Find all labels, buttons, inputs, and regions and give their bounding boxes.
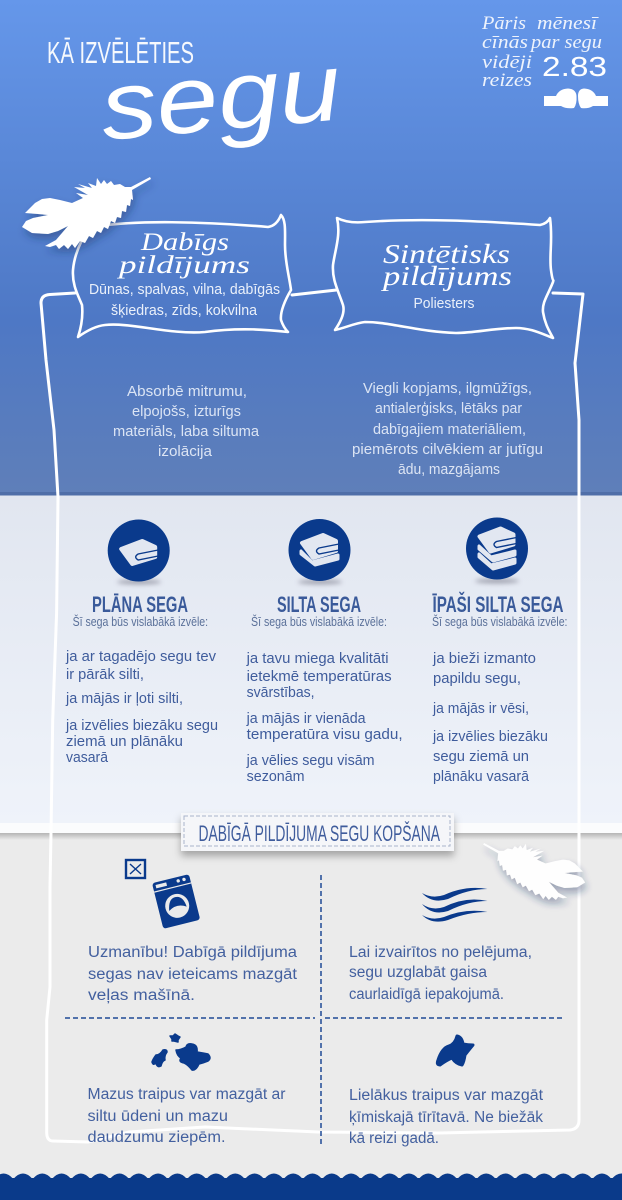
list: thin blanket	[65, 649, 218, 766]
list: extra warm blanket	[432, 651, 548, 785]
heading: īpaši silta sega: ĪPAŠI SILTA SEGA	[432, 592, 564, 617]
list: thin blanket: ja izvēlies biezāku segu	[65, 718, 218, 734]
tip text: Mazus traipus var mazgāt ar	[88, 1086, 286, 1103]
column: thin blanket	[65, 520, 218, 766]
icon: large stain	[437, 1036, 473, 1065]
tip text: Lielākus traipus var mazgāt	[349, 1087, 544, 1104]
fact: fights for the blanket: vidēji	[482, 52, 532, 73]
heading: sintētisks pildījums: pildījums	[380, 261, 512, 291]
tip text: segas nav ieteicams mazgāt	[88, 966, 298, 983]
tip text: caurlaidīgā iepakojumā.	[349, 986, 504, 1003]
heading: dabīgs pildījums: Dabīgs	[140, 229, 229, 256]
icon: small stains	[152, 1034, 210, 1070]
list: thin blanket: ja mājās ir ļoti silti,	[65, 691, 183, 707]
list: warm blanket: svārstības,	[247, 685, 315, 701]
background: dark divider strip	[0, 492, 622, 496]
tip text	[88, 944, 298, 1004]
tip text: Lai izvairītos no pelējuma,	[349, 944, 532, 961]
pillow text: natural filling	[89, 229, 280, 319]
title	[47, 33, 345, 161]
heading: plāna sega: PLĀNA SEGA	[92, 592, 188, 617]
list: warm blanket: sezonām	[247, 769, 305, 785]
list: extra warm blanket: plānāku vasarā	[433, 769, 530, 785]
synthetic material: Poliesters	[414, 296, 474, 312]
icon: feather top	[22, 177, 151, 249]
section label: care	[181, 813, 454, 851]
list: thin blanket: ziemā un plānāku	[66, 734, 183, 750]
natural materials list: Dūnas, spalvas, vilna, dabīgās	[89, 282, 280, 298]
tip text: segu uzglabāt gaisa	[349, 964, 487, 981]
care tip: small stains	[88, 1034, 286, 1146]
icon: air waves	[422, 888, 488, 922]
text: synthetic benefits: piemērots cilvēkiem ar jutīgu	[352, 442, 543, 458]
tip text	[349, 944, 532, 1003]
text: synthetic benefits: ādu, mazgājams	[398, 462, 500, 478]
text: natural benefits: Absorbē mitrumu,	[127, 384, 247, 400]
background: light blue section	[0, 494, 622, 823]
dashed grid dividers	[65, 875, 562, 1147]
pillow text: synthetic filling	[380, 239, 512, 312]
text: synthetic benefits: dabīgajiem materiāliem,	[373, 422, 526, 438]
list: warm blanket: ja vēlies segu visām	[246, 753, 375, 769]
fact: fights for the blanket: cīnās	[482, 32, 528, 53]
fact: fights for the blanket	[481, 13, 607, 91]
text: natural benefits: materiāls, laba siltuma	[113, 424, 260, 440]
background: grey care section	[0, 833, 622, 1178]
list: warm blanket: ja mājās ir vienāda	[246, 711, 367, 727]
tip text: daudzumu ziepēm.	[88, 1129, 226, 1146]
text: synthetic benefits: Viegli kopjams, ilgmūžīgs,	[363, 381, 532, 397]
icon: one folded blanket	[108, 520, 170, 584]
blanket outline frame and pillows	[41, 215, 583, 1142]
number 2.83: 2.83	[542, 51, 607, 82]
icon: three folded blankets	[466, 518, 528, 584]
heading: sintētisks pildījums: Sintētisks	[383, 239, 510, 269]
subheading: Šī sega būs vislabākā izvēle:	[251, 614, 387, 629]
icon: crossed box	[126, 860, 145, 878]
list: thin blanket: ir pārāk silti,	[66, 667, 144, 683]
icon: feather bottom	[483, 843, 585, 900]
column: warm blanket	[246, 519, 403, 785]
text: synthetic benefits: antialerģisks, lētāks par	[375, 401, 522, 417]
background: blue header section	[0, 0, 622, 494]
tip text: siltu ūdeni un mazu	[88, 1108, 228, 1125]
care tip: large stains	[349, 1036, 544, 1147]
list: extra warm blanket: segu ziemā un	[433, 749, 529, 765]
white band	[0, 823, 622, 833]
label text: DABĪGĀ PILDĪJUMA SEGU KOPŠANA	[198, 821, 440, 846]
care tip: washing machine	[88, 860, 298, 1004]
footer: navy scalloped band	[0, 1174, 622, 1200]
fact: fights for the blanket: mēnesī	[537, 13, 599, 34]
list: extra warm blanket: ja bieži izmanto	[432, 651, 536, 667]
tip text	[349, 1087, 544, 1147]
list: extra warm blanket: papildu segu,	[433, 671, 521, 687]
title word: segu: segu	[97, 33, 345, 161]
band shadow	[0, 833, 622, 840]
tip text: veļas mašīnā.	[88, 987, 195, 1004]
heading: sintētisks pildījums	[380, 239, 512, 291]
list: thin blanket: ja ar tagadējo segu tev	[65, 649, 217, 665]
pillow: synthetic filling outline	[333, 218, 553, 338]
fact: fights for the blanket: par segu	[529, 32, 602, 53]
tip text: Uzmanību! Dabīgā pildījuma	[88, 944, 297, 961]
tip text: kā reizi gadā.	[349, 1130, 439, 1147]
tip text: ķīmiskajā tīrītavā. Ne biežāk	[349, 1109, 543, 1126]
list: warm blanket: ja tavu miega kvalitāti	[246, 651, 389, 667]
title line: kā izvēlēties: KĀ IZVĒLĒTIES	[47, 35, 194, 70]
pillow: natural filling outline	[73, 215, 291, 337]
list: warm blanket	[246, 651, 403, 785]
frame outline	[41, 290, 583, 1142]
text: natural benefits: izolācija	[158, 444, 213, 460]
list: warm blanket: ietekmē temperatūras	[247, 669, 392, 685]
list: thin blanket: vasarā	[66, 750, 109, 766]
text: natural benefits	[113, 384, 260, 460]
text: synthetic benefits	[352, 381, 543, 478]
subheading: Šī sega būs vislabākā izvēle:	[73, 614, 208, 629]
column: extra warm blanket	[432, 518, 568, 785]
fact: fights for the blanket: Pāris	[481, 13, 526, 34]
heading: dabīgs pildījums	[116, 229, 250, 279]
heading: silta sega: SILTA SEGA	[277, 592, 361, 617]
tip text	[88, 1086, 286, 1146]
fact: fights for the blanket: reizes	[482, 70, 532, 91]
icon: washing machine	[152, 874, 200, 929]
list: extra warm blanket: ja izvēlies biezāku	[432, 729, 548, 745]
subheading: Šī sega būs vislabākā izvēle:	[432, 614, 568, 629]
text: natural benefits: elpojošs, izturīgs	[132, 404, 241, 420]
icon: two folded blankets	[288, 519, 350, 584]
heading: dabīgs pildījums: pildījums	[116, 252, 250, 279]
care tip: storage	[349, 888, 532, 1003]
list: extra warm blanket: ja mājās ir vēsi,	[432, 701, 529, 717]
list: warm blanket: temperatūra visu gadu,	[247, 727, 403, 743]
icon: boxing gloves	[544, 88, 608, 108]
natural materials list: šķiedras, zīds, kokvilna	[111, 303, 258, 319]
natural materials list	[89, 282, 280, 319]
